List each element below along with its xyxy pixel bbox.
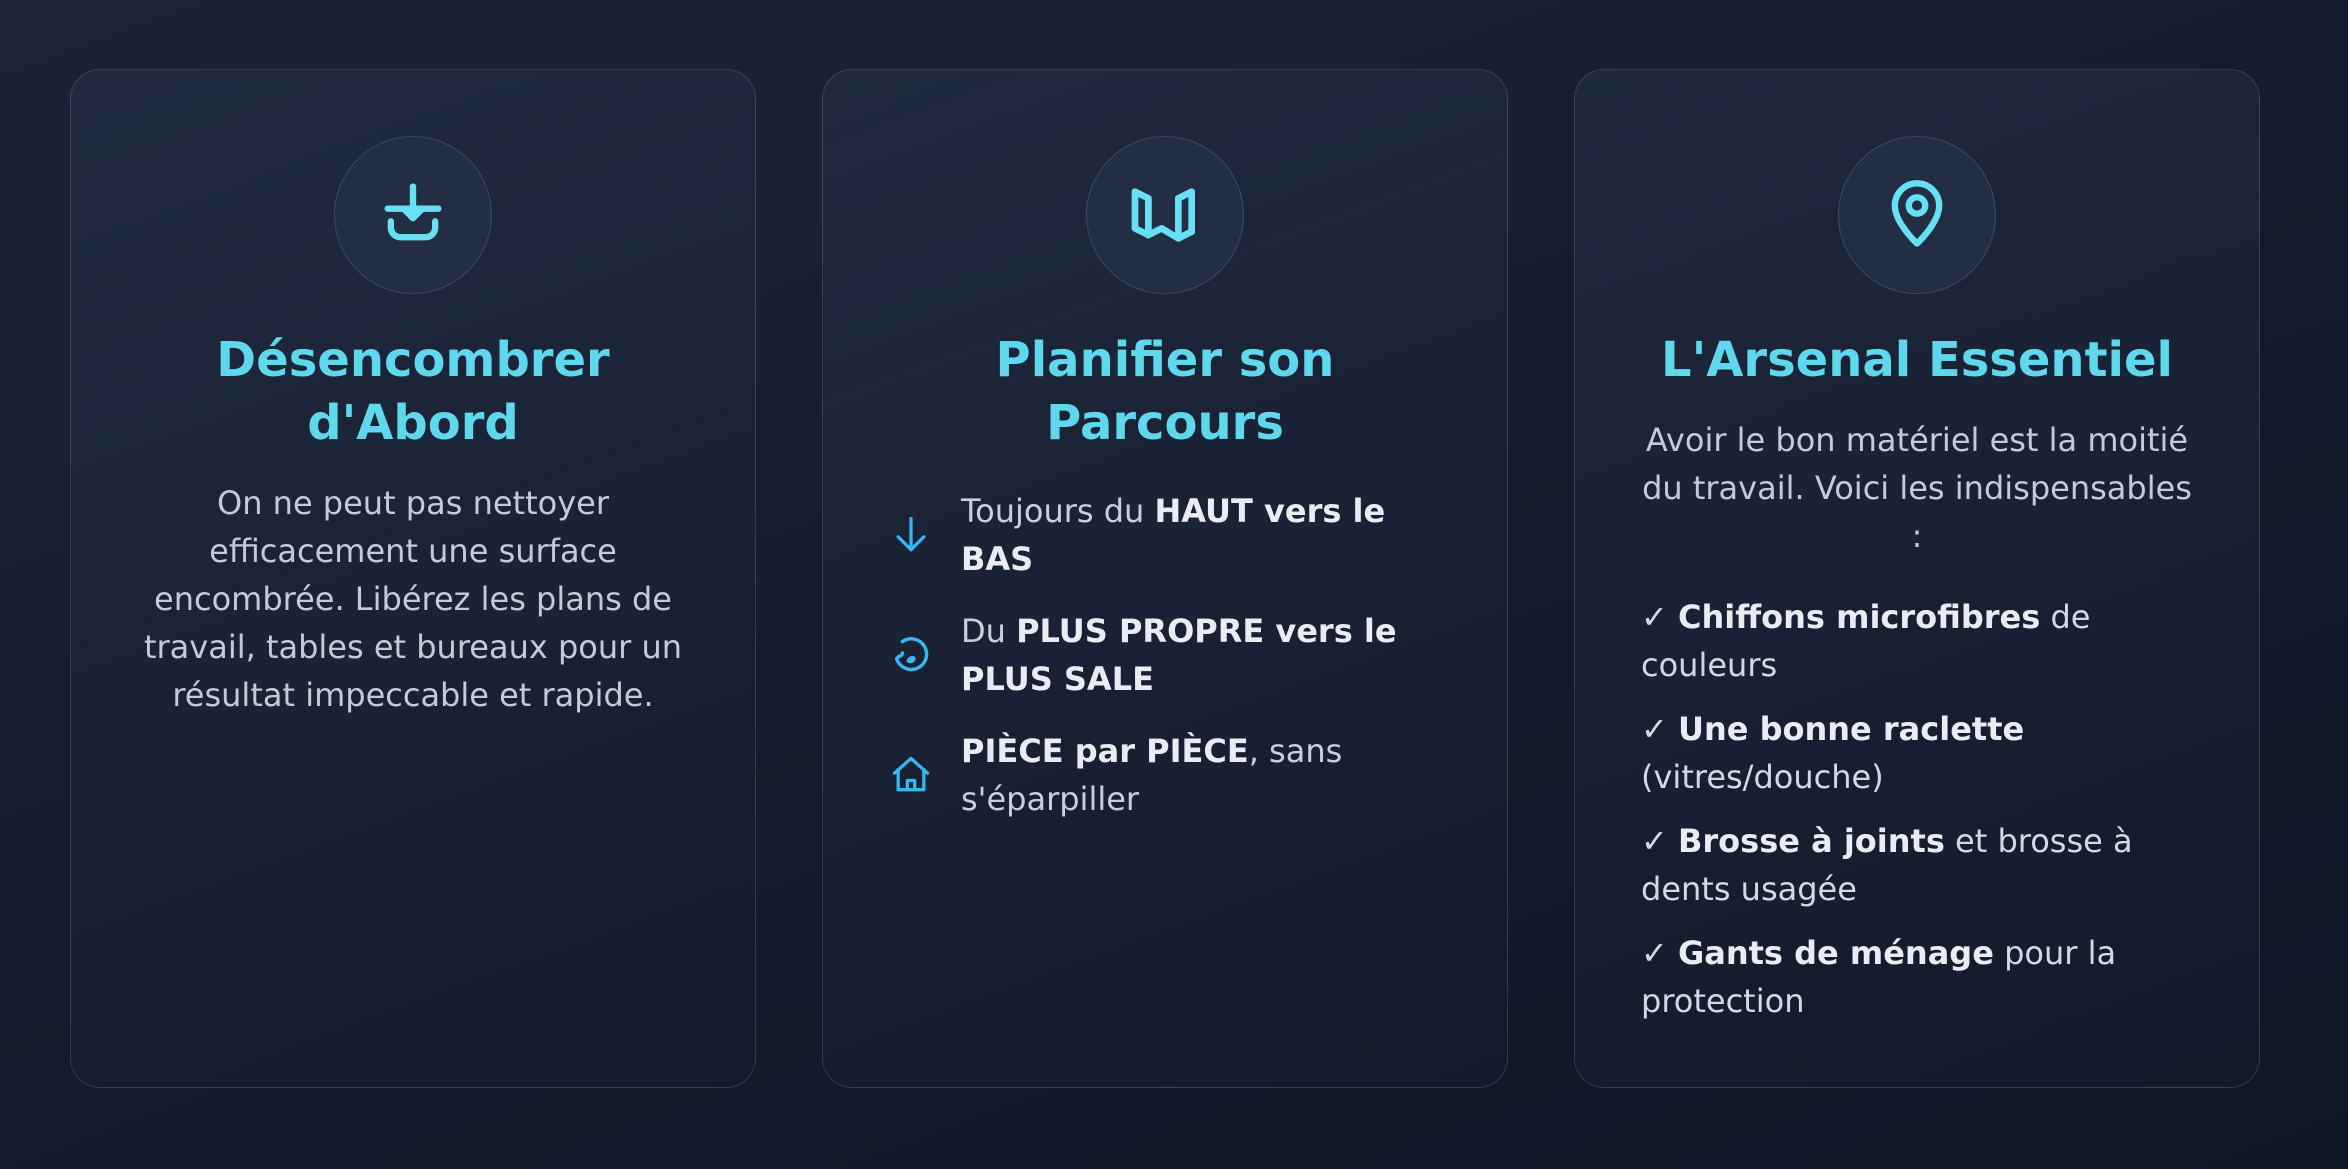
icon: map pin bbox=[1838, 136, 1996, 294]
icon: map bbox=[1086, 136, 1244, 294]
heading: d'Abord bbox=[307, 395, 519, 451]
item: ✓ Gants de ménage pour la protection bbox=[1641, 934, 2116, 1020]
panel: declutter bbox=[70, 69, 756, 1088]
heading: Parcours bbox=[1046, 395, 1284, 451]
panel: essential arsenal bbox=[1574, 69, 2260, 1088]
text block: On ne peut pas nettoyer efficacement une surface encombrée. Libérez les plans de travail, tables et bureaux pour un résultat impeccable et rapide. bbox=[144, 484, 682, 714]
list bbox=[892, 492, 1397, 818]
item: clean to dirty: Du PLUS PROPRE vers le PLUS SALE bbox=[961, 612, 1397, 698]
icon: inbox download bbox=[334, 136, 492, 294]
heading: L'Arsenal Essentiel bbox=[1661, 332, 2173, 388]
checklist bbox=[1641, 598, 2133, 1020]
heading bbox=[216, 332, 610, 451]
item: top to bottom: Toujours du HAUT vers le BAS bbox=[961, 492, 1385, 578]
intro text: Avoir le bon matériel est la moitié du travail. Voici les indispensables : bbox=[1642, 421, 2192, 555]
heading: Planifier son bbox=[996, 332, 1334, 388]
item: ✓ Chiffons microfibres de couleurs bbox=[1641, 598, 2090, 684]
panel: plan route bbox=[822, 69, 1508, 1088]
item: ✓ Une bonne raclette (vitres/douche) bbox=[1641, 710, 2024, 796]
item: room by room: PIÈCE par PIÈCE, sans s'éparpiller bbox=[961, 732, 1342, 818]
heading: Désencombrer bbox=[216, 332, 610, 388]
heading bbox=[996, 332, 1334, 451]
item: ✓ Brosse à joints et brosse à dents usagée bbox=[1641, 822, 2133, 908]
